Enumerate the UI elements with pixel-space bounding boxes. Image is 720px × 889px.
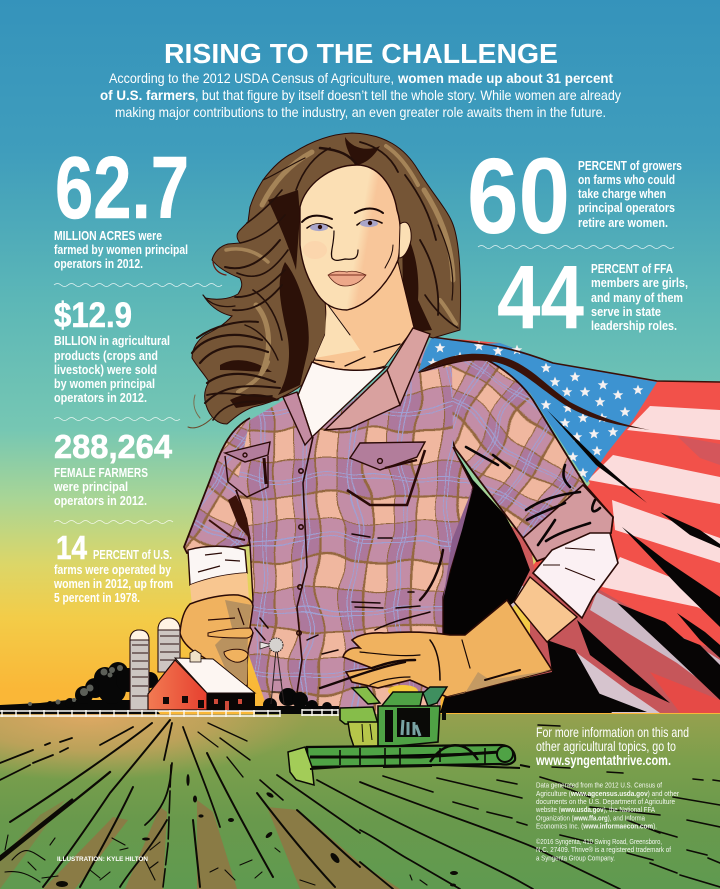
data sources note: Agriculture (www.agcensus.usda.gov) and other (536, 789, 680, 798)
silos (130, 618, 180, 710)
stat: 62.7 million acres: farmed by women principal (54, 242, 188, 257)
flag canton with stars (415, 337, 657, 483)
copyright note: ©2016 Syngenta, 410 Swing Road, Greensboro, (536, 837, 662, 846)
stat: 60 percent of growers: 60 (467, 135, 570, 256)
stat: $12.9 billion: operators in 2012. (54, 390, 147, 405)
yellow patch behind the machine (388, 685, 418, 697)
stat: 14 percent of farms: 14 (56, 529, 88, 566)
shirt placket and buttons (297, 437, 313, 693)
stat: 288,264 female farmers: 288,264 (54, 428, 173, 465)
stat: 60 percent of growers: retire are women. (578, 215, 668, 230)
stat: 60 percent of growers: on farms who could (578, 172, 675, 187)
right glove and hand (320, 600, 552, 697)
stat: 44 percent of FFA: 44 (497, 248, 584, 348)
right forearm and white cuff (514, 533, 618, 642)
header reel (307, 745, 515, 767)
neck (313, 262, 414, 370)
right sleeve (418, 360, 614, 562)
red barn (148, 650, 255, 711)
stat: $12.9 billion: by women principal (54, 376, 155, 391)
call to action: more information: www.syngentathrive.com. (535, 753, 671, 768)
stat: 60 percent of growers: PERCENT of growers (578, 158, 682, 173)
stat: 62.7 million acres: 62.7 (55, 138, 189, 237)
combine harvester (288, 685, 530, 785)
stat: 14 percent of farms: PERCENT of U.S. (93, 547, 172, 562)
intro paragraph (100, 71, 621, 120)
black gap between torso and arm (440, 447, 530, 645)
left glove (180, 595, 253, 690)
grain bin flaps (352, 687, 380, 704)
face (300, 165, 411, 366)
stat: 60 percent of growers: principal operators (578, 200, 675, 215)
woman illustration (180, 133, 650, 720)
stat: $12.9 billion: livestock) were sold (54, 362, 157, 377)
intro paragraph: of U.S. farmers (100, 88, 195, 103)
intro paragraph: women made up about 31 percent (397, 71, 613, 86)
data sources note: documents on the U.S. Department of Agriculture (536, 797, 675, 806)
hair strand over the flag (418, 354, 650, 430)
hair highlights (226, 146, 456, 392)
stat: $12.9 billion: BILLION in agricultural (54, 333, 170, 348)
flag base stripes (415, 337, 720, 713)
stat: 14 percent of farms: farms were operated by (54, 562, 172, 577)
left cuff and forearm (188, 546, 249, 606)
stat: 60 percent of growers: take charge when (578, 186, 666, 201)
farm field (0, 714, 720, 889)
field row lines (0, 720, 720, 889)
stat: 288,264 female farmers (53, 428, 173, 508)
left pocket (225, 442, 270, 497)
intro paragraph: According to the 2012 USDA Census of Agriculture, (109, 71, 394, 86)
stat: 62.7 million acres (54, 138, 189, 271)
white fences (0, 709, 338, 717)
main body (348, 722, 379, 747)
shirt wrinkles (255, 534, 443, 654)
hair strands (188, 142, 458, 428)
stat: 44 percent of FFA: serve in state (591, 304, 661, 319)
brown furrows (0, 800, 400, 889)
windmill (260, 638, 284, 704)
stat: $12.9 billion: $12.9 (54, 296, 132, 335)
stat: 14 percent of farms: women in 2012, up from (53, 576, 173, 591)
call to action: more information (535, 725, 689, 768)
stat: 44 percent of FFA: and many of them (591, 290, 683, 305)
stat: 62.7 million acres: MILLION ACRES were (54, 228, 162, 243)
American flag cape (415, 337, 720, 713)
data sources note (535, 780, 680, 830)
hair (188, 133, 461, 428)
stat: 44 percent of FFA: leadership roles. (591, 318, 677, 333)
data sources note: Economics Inc. (www.informaecon.com). (536, 822, 657, 830)
data sources note: Data generated from the 2012 U.S. Census of (536, 780, 662, 790)
stat: $12.9 billion (54, 296, 170, 405)
cape black folds (440, 410, 720, 713)
stat: 44 percent of FFA: PERCENT of FFA (591, 261, 673, 276)
stat: $12.9 billion: products (crops and (54, 348, 158, 363)
grass marks and soil clods (56, 774, 458, 887)
stat: 60 percent of growers (467, 135, 682, 256)
intro paragraph: making major contributions to the industry, an even greater role awaits them in the future. (115, 105, 606, 120)
stat: 288,264 female farmers: were principal (53, 479, 128, 494)
collar (283, 328, 430, 445)
data sources note: website (www.usda.gov), the National FFA (535, 805, 655, 814)
stat: 62.7 million acres: operators in 2012. (54, 256, 143, 271)
call to action: more information: other agricultural topics, go to (536, 739, 676, 754)
right pocket (347, 442, 425, 505)
copyright note: a Syngenta Group Company. (536, 854, 615, 862)
stat: 44 percent of FFA (497, 248, 688, 348)
stat: 288,264 female farmers: FEMALE FARMERS (54, 465, 148, 480)
illustration credit: ILLUSTRATION: KYLE HILTON (57, 856, 148, 863)
intro paragraph: , but that figure by itself doesn’t tell the whole story. While women are already (195, 88, 621, 103)
stat: 14 percent of farms (53, 529, 173, 605)
copyright note: N.C. 27409. Thrive® is a registered trademark of (536, 845, 671, 854)
copyright note (536, 837, 671, 862)
farm trees (0, 662, 339, 716)
torso with plaid shirt (183, 340, 474, 714)
data sources note: Organization (www.ffa.org), and Informa (536, 813, 645, 822)
cab (378, 706, 440, 746)
ear (399, 222, 411, 258)
header divider (288, 747, 314, 785)
stat: 44 percent of FFA: members are girls, (591, 275, 688, 290)
hair dark mass (220, 137, 432, 408)
left sleeve (185, 419, 250, 552)
stat: 288,264 female farmers: operators in 2012. (54, 493, 147, 508)
upper body (340, 707, 378, 724)
title: RISING TO THE CHALLENGE (164, 38, 558, 69)
white tee (298, 362, 386, 437)
stat: 14 percent of farms: 5 percent in 1978. (54, 590, 140, 605)
